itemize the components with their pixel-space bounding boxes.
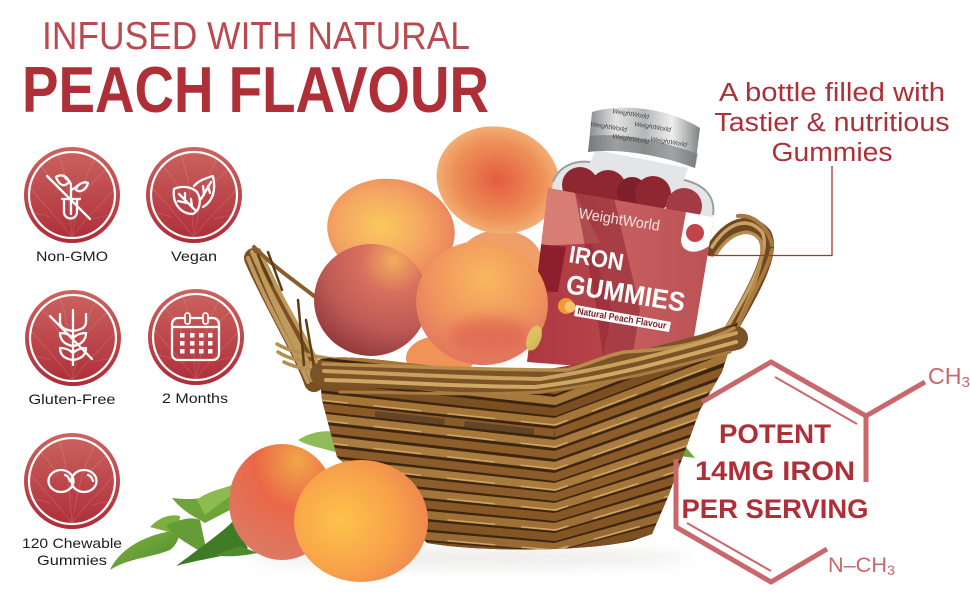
- leaves: [110, 431, 695, 570]
- bottle cap: WeightWorld: [612, 133, 650, 146]
- bottle cap: WeightWorld: [612, 108, 650, 121]
- molecule label: N-CH3: 3: [887, 562, 895, 578]
- badge: 2 Months: 2 Months: [162, 390, 228, 406]
- left basket handle: [248, 247, 340, 382]
- basket rim: [322, 328, 736, 394]
- badge: Gluten-Free: [25, 290, 121, 407]
- brand name: WeightWorld: [577, 205, 661, 235]
- molecule label: CH3: 3: [962, 374, 970, 391]
- callout text: bottle filled with tastier gummies: [714, 79, 950, 167]
- right basket handle: [712, 216, 772, 346]
- callout: potent 14mg iron per serving: PER SERVING: [682, 494, 868, 524]
- bottle: [527, 108, 714, 372]
- badge: Non-GMO: Non-GMO: [36, 248, 108, 264]
- peach: bottom in basket: [406, 336, 474, 380]
- callout leader line: [708, 166, 832, 256]
- molecule label: CH3: CH: [928, 363, 961, 389]
- badge: Vegan: [146, 147, 242, 264]
- callout text: bottle filled with tastier gummies: Gummies: [772, 139, 892, 167]
- bottle cap: [588, 108, 700, 168]
- badge: 120 Chewable Gummies: 120 Chewable: [22, 535, 122, 551]
- badge: 2 Months: [148, 289, 244, 406]
- bottle label: [527, 188, 714, 372]
- callout: potent 14mg iron per serving: POTENT: [719, 419, 832, 449]
- badge: 120 Chewable Gummies: [22, 433, 122, 568]
- peach: ground left: [229, 444, 335, 560]
- title: peach flavour: PEACH FLAVOUR: [22, 53, 489, 126]
- flavour strip: Natural Peach Flavour: [577, 306, 667, 332]
- badge: Vegan: Vegan: [171, 248, 217, 264]
- peach: front: [408, 232, 556, 374]
- bottle cap: WeightWorld: [590, 121, 628, 134]
- bottle cap: WeightWorld: [634, 121, 672, 134]
- callout: potent 14mg iron per serving: 14MG IRON: [695, 456, 855, 486]
- product name: IRON: [567, 241, 626, 277]
- bottle cap: WeightWorld: [650, 136, 688, 149]
- title: infused with natural: INFUSED WITH NATURAL: [42, 15, 470, 58]
- badge: Gluten-Free: Gluten-Free: [28, 391, 116, 407]
- peach: top: [424, 113, 572, 247]
- callout text: bottle filled with tastier gummies: A bottle filled with: [719, 79, 945, 107]
- gummies: [562, 167, 702, 224]
- wicker basket: [310, 322, 748, 550]
- flavour strip: [558, 298, 671, 332]
- ground shadow: [250, 548, 690, 568]
- peach: left lower: [314, 244, 428, 356]
- badge: Non-GMO: [24, 147, 120, 264]
- callout text: bottle filled with tastier gummies: Tastier & nutritious: [714, 109, 950, 137]
- peach: back small: [458, 230, 542, 294]
- product name: [564, 241, 687, 318]
- molecule diagram: [676, 362, 925, 582]
- badge: 120 Chewable Gummies: Gummies: [37, 552, 107, 568]
- peach: left upper: [321, 171, 461, 289]
- bottle glass: [527, 150, 713, 360]
- product name: GUMMIES: [564, 269, 687, 318]
- callout: potent 14mg iron per serving: [682, 419, 868, 524]
- peach: ground right: [294, 460, 428, 582]
- molecule label: N-CH3: N–CH: [828, 554, 885, 577]
